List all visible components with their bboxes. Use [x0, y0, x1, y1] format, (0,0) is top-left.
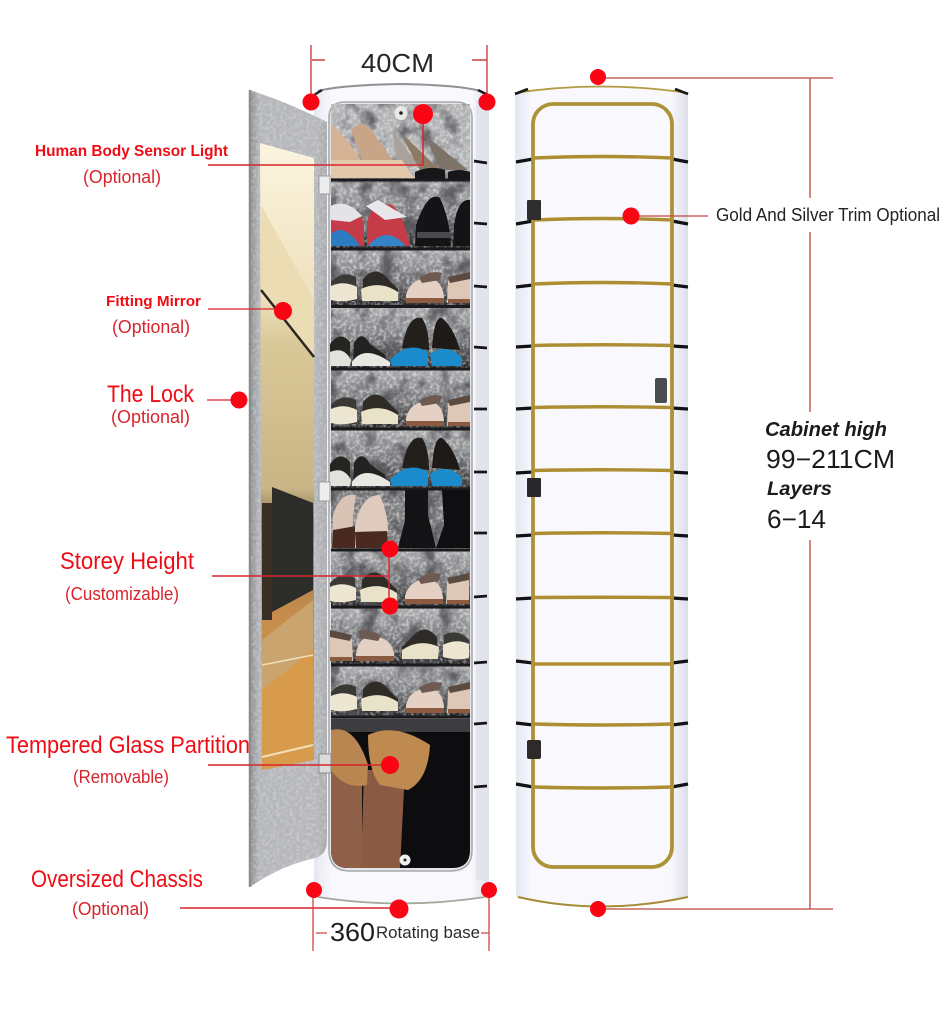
black bands — [516, 159, 688, 787]
width dimension: 360 rotating base: Rotating base — [376, 923, 480, 942]
callout: the lock — [107, 381, 248, 427]
row 3: flats — [331, 271, 470, 303]
width dimension: 40CM: 40CM — [361, 50, 434, 78]
row 10: flats — [331, 681, 470, 713]
row 8: flats — [330, 572, 469, 604]
callout: human body sensor light — [35, 104, 433, 187]
callout: storey height: Storey Height — [60, 548, 194, 575]
callout: human body sensor light: Human Body Sensor Light — [35, 143, 228, 160]
closed cabinet with gold trim — [515, 86, 688, 906]
callout: tempered glass partition: Tempered Glass Partition — [6, 732, 250, 759]
callout: human body sensor light: (Optional) — [83, 167, 161, 187]
row 4: blue flats — [330, 318, 462, 366]
callout: tempered glass partition: (Removable) — [73, 767, 169, 787]
height dimension with cabinet specifications — [590, 69, 895, 917]
width dimension: 40CM — [302, 45, 496, 110]
row 5: flats — [331, 394, 470, 426]
shelf backs — [331, 104, 470, 178]
height dimension with cabinet specifications: 6−14 — [767, 504, 826, 534]
callout: gold and silver trim — [622, 205, 940, 225]
row 2: sneakers and black shoes — [331, 197, 470, 246]
height dimension with cabinet specifications: 99−211CM — [766, 444, 895, 474]
cabinet top and bottom rims — [515, 86, 688, 93]
shelves — [331, 180, 470, 717]
callout: oversized chassis: (Optional) — [72, 899, 149, 919]
gold shelves trim — [534, 156, 672, 788]
callout: storey height: (Customizable) — [65, 584, 179, 604]
callout: fitting mirror: Fitting Mirror — [106, 293, 201, 310]
callout: oversized chassis — [31, 866, 408, 919]
callout: oversized chassis: Oversized Chassis — [31, 866, 203, 893]
callout: gold and silver trim: Gold And Silver Trim Optional — [716, 205, 940, 225]
shoe storage bay — [329, 102, 472, 871]
cabinet with open door — [250, 84, 489, 904]
latches and lock — [527, 200, 541, 220]
row 1: high heels and flats — [331, 124, 470, 179]
width dimension: 360 rotating base: 360 — [330, 917, 375, 947]
height dimension with cabinet specifications: Layers — [767, 479, 832, 500]
bottom row: fur boots — [331, 719, 470, 868]
cabinet body — [314, 84, 489, 904]
open mirror door — [250, 90, 331, 887]
gold door frame — [533, 104, 672, 867]
row 9: flats reversed colours — [330, 629, 469, 661]
callout: tempered glass partition — [6, 732, 399, 787]
height dimension with cabinet specifications: Cabinet high — [765, 419, 887, 441]
row 6: blue flats — [330, 438, 462, 486]
callout: the lock: (Optional) — [111, 407, 190, 427]
callout: fitting mirror — [106, 293, 292, 337]
callout: storey height — [60, 540, 398, 614]
fitting mirror — [260, 143, 314, 770]
callout: the lock: The Lock — [107, 381, 195, 408]
hinges — [319, 176, 330, 194]
sensor light — [394, 106, 408, 120]
width dimension: 360 rotating base — [306, 882, 497, 951]
callout: fitting mirror: (Optional) — [112, 317, 190, 337]
row 7: heels and black boots — [332, 490, 470, 548]
